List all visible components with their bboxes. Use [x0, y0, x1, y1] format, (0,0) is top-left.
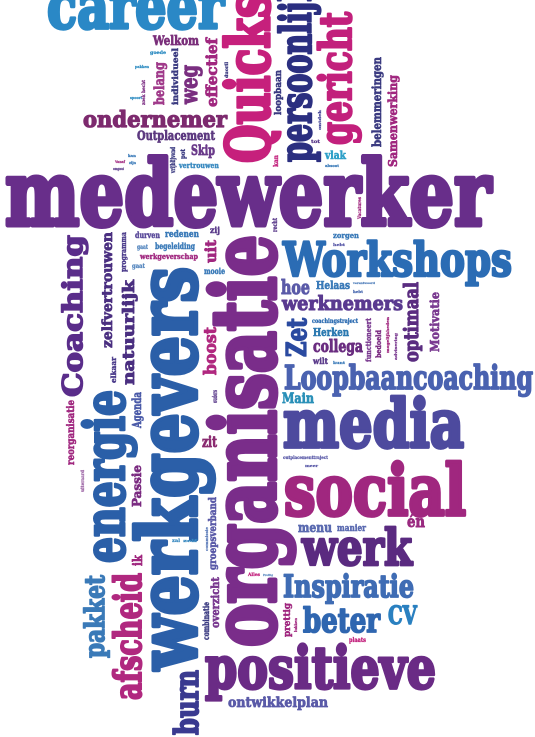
small words: absoot [325, 163, 339, 168]
word: overzicht: overzicht [209, 576, 222, 628]
word: hoe: hoe [281, 275, 310, 299]
small words: outplacementtraject [283, 455, 329, 461]
small words: kan [273, 154, 280, 167]
word: pakket: pakket [80, 575, 111, 658]
word: belemmeringen: belemmeringen [370, 57, 384, 147]
word: ontwikkelplan: ontwikkelplan [228, 695, 328, 711]
word: werknemers: werknemers [281, 291, 403, 315]
word: Herken: Herken [313, 326, 349, 339]
word: ondernemer: ondernemer [83, 107, 227, 133]
word: weg: weg [176, 65, 203, 105]
word: energie: energie [72, 390, 137, 563]
word: uit: uit [202, 240, 220, 263]
word: Main: Main [282, 391, 314, 407]
small words: redenen [165, 230, 199, 240]
small words: omgaat [113, 166, 124, 171]
word: Welkom: Welkom [152, 34, 199, 49]
word: Helaas: Helaas [316, 279, 350, 292]
word: Inspiratie: Inspiratie [283, 569, 414, 605]
small words: zijn [129, 160, 136, 165]
small words: meer [305, 463, 319, 468]
small words: pakken [135, 64, 149, 69]
small words: hebt [333, 242, 345, 247]
word: organisatie: organisatie [192, 235, 296, 647]
word: prettig: prettig [283, 602, 293, 637]
small words: mogelijkheden [385, 317, 390, 353]
word: vertrouwen: vertrouwen [178, 161, 219, 170]
small words: mooie [204, 266, 225, 276]
small words: gaat [137, 244, 148, 251]
word: Outplacement: Outplacement [137, 129, 215, 144]
small words: Alles [247, 572, 260, 578]
word: individueel: individueel [170, 48, 180, 105]
small words: lukken [293, 618, 298, 632]
word: combinatie: combinatie [201, 602, 211, 640]
word: groepsverband: groepsverband [208, 497, 219, 570]
small words: durven [135, 230, 160, 240]
word: zit: zit [202, 433, 217, 451]
small words: begeleiding [155, 241, 195, 251]
word: media: media [283, 385, 464, 463]
small words: duoril [224, 62, 230, 78]
word: collega: collega [313, 337, 363, 357]
word: belang: belang [152, 62, 168, 105]
small words: ontdek [317, 110, 322, 130]
word: CV: CV [388, 601, 417, 630]
small words: werkgeverschap [139, 252, 198, 261]
word: afscheid: afscheid [106, 573, 150, 700]
word: zelfvertrouwen: zelfvertrouwen [100, 232, 116, 348]
word: effectief: effectief [203, 36, 221, 107]
word: Skip: Skip [191, 143, 215, 159]
word: wilt: wilt [312, 356, 328, 366]
word: werkgevers: werkgevers [121, 267, 216, 671]
small words: commissie [204, 527, 209, 551]
small words: vrijblijvend [170, 146, 177, 174]
small words: tot [311, 139, 321, 145]
word: manier: manier [337, 524, 366, 534]
word: vlak: vlak [324, 149, 346, 162]
small words: zij [210, 225, 220, 235]
small words: recht [272, 218, 279, 232]
small words: verantwoord [352, 281, 376, 285]
small words: functioneert [364, 317, 373, 362]
small words: zorgen [333, 231, 359, 240]
word: positieve: positieve [205, 634, 436, 702]
small words: gaat [132, 263, 145, 270]
word: ik: ik [131, 554, 146, 566]
small words: ouders [212, 390, 219, 403]
small words: hebt [353, 289, 363, 294]
small words: kunt [333, 360, 345, 365]
word: en: én [407, 512, 425, 531]
small words: zoek hecht [141, 79, 147, 105]
word: Zet: Zet [282, 318, 313, 357]
small words: uiteraard [80, 470, 86, 492]
word: social: social [284, 449, 466, 532]
word: Agenda: Agenda [130, 392, 144, 429]
small words: zelf [183, 538, 197, 543]
word: Motivatie: Motivatie [428, 292, 442, 352]
word: Samenwerking: Samenwerking [386, 74, 400, 167]
small words: zal [172, 538, 180, 544]
word: werk: werk [301, 518, 413, 577]
word: optimaal: optimaal [399, 282, 423, 362]
small words [80, 50, 398, 644]
small words: goede [150, 50, 166, 56]
word: beter: beter [303, 601, 381, 641]
word: loopbaan: loopbaan [274, 70, 284, 115]
word: natuurlijk: natuurlijk [119, 279, 138, 385]
small words: programma [119, 232, 128, 272]
word: Coaching: Coaching [58, 235, 89, 397]
small words: Vacatures [357, 197, 363, 220]
small words: bedoeld [374, 330, 383, 358]
small words: elkaar [109, 357, 118, 383]
small words: plaats [349, 637, 367, 644]
word: boost: boost [201, 327, 221, 375]
small words: coachingstraject [312, 318, 358, 325]
word: menu: menu [298, 521, 332, 536]
small words: kan [128, 153, 136, 158]
small words: advisering [393, 333, 398, 360]
small words: pot [180, 149, 187, 159]
word: reorganisatie: reorganisatie [66, 400, 77, 465]
word: Passie: Passie [130, 465, 144, 507]
small words: Prettig [263, 573, 274, 577]
small words: Vanaf [114, 159, 125, 164]
word: burn: burn [167, 670, 206, 735]
small words: spoort [130, 95, 142, 100]
